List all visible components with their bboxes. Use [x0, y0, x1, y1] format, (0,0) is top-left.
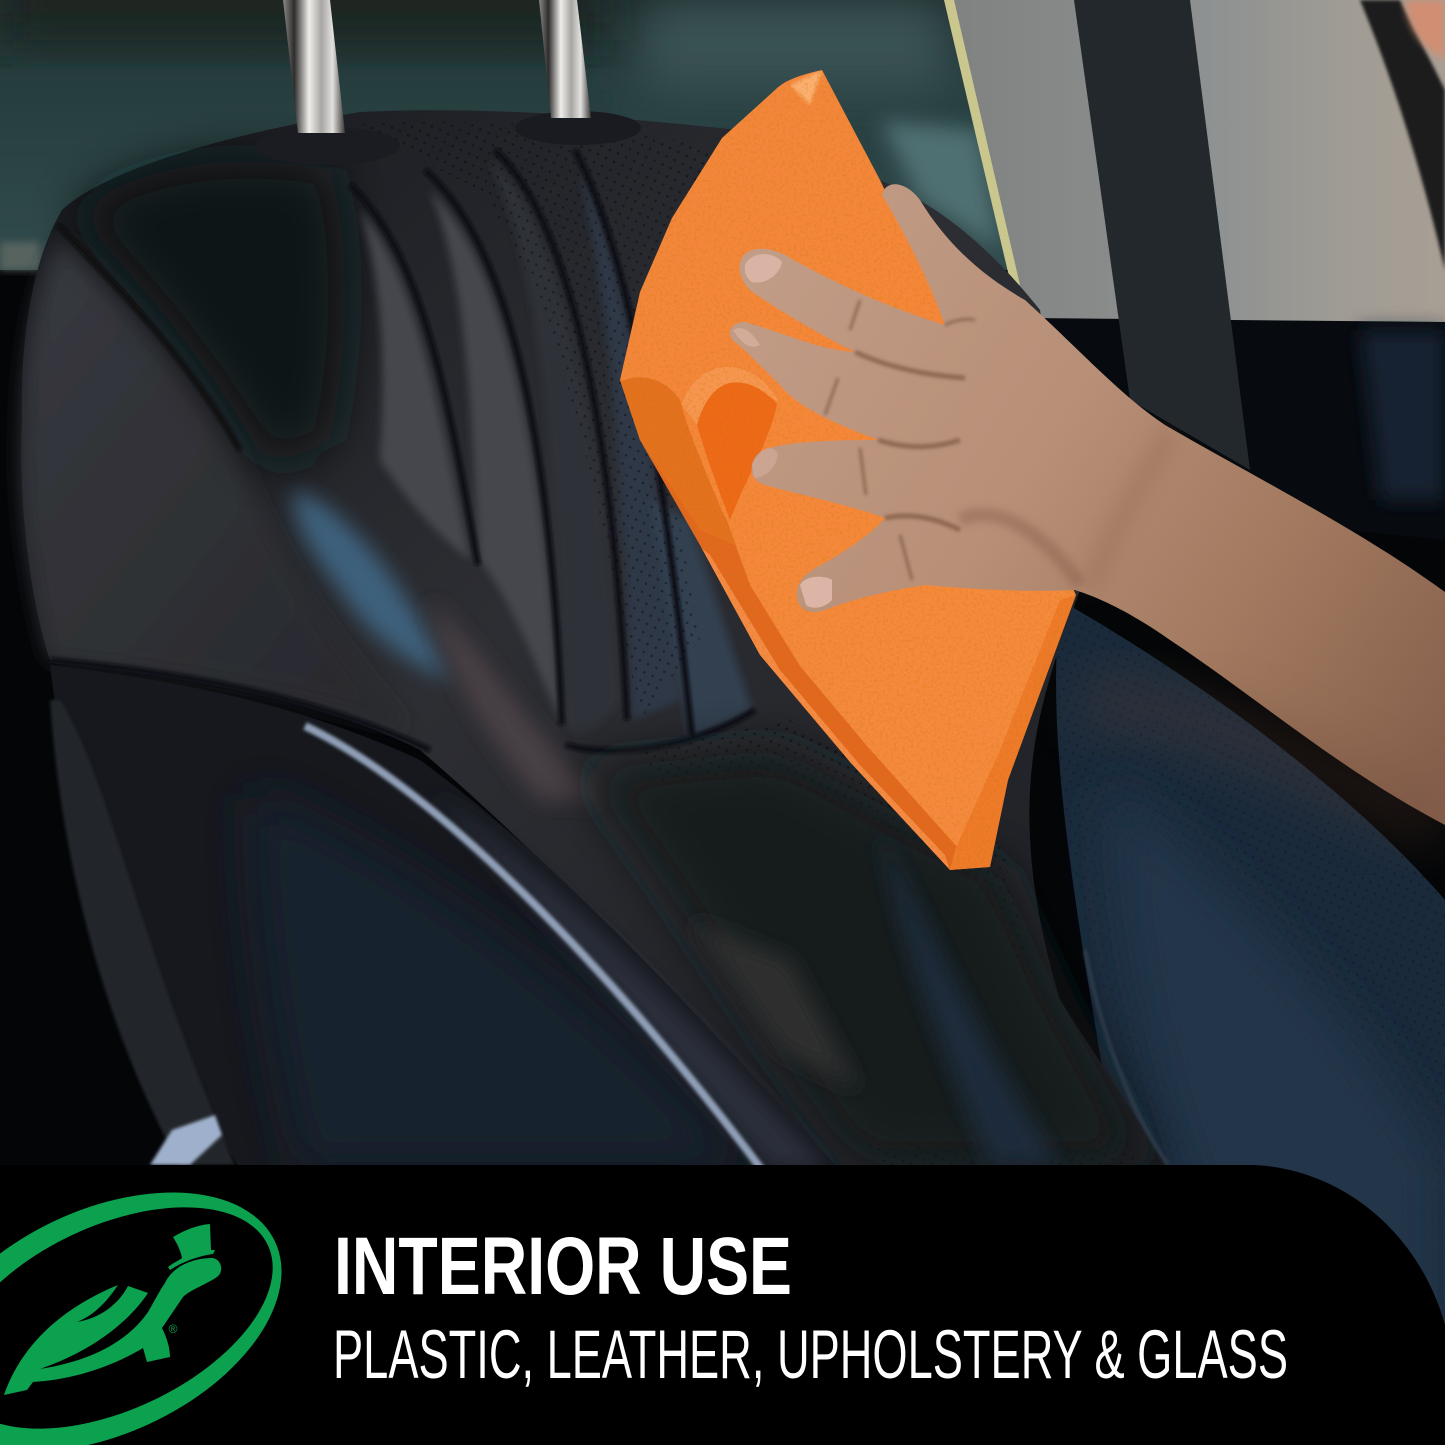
background: window view [0, 0, 1010, 270]
seat: right panel [1056, 600, 1445, 1445]
logo: top hat [168, 1224, 215, 1270]
towel: microfiber grain [600, 60, 1090, 880]
towel: lower darker layers [640, 440, 958, 870]
seat: dark glossy shoulder [75, 161, 345, 470]
seat: left side panel [21, 240, 410, 730]
logo: registered mark: ® [169, 1322, 178, 1336]
seat: lower bolster [50, 665, 840, 1170]
headrest post right [515, 0, 641, 145]
logo: turtle in oval [0, 1193, 282, 1445]
seat: headrest and backrest [21, 110, 1170, 1170]
seat: rib shadow lines [50, 150, 755, 751]
seat: pleated ribs [360, 160, 752, 740]
hand and arm [730, 184, 1445, 825]
seat: white clip [150, 1115, 222, 1165]
nails [745, 254, 782, 283]
headrest post left [254, 0, 400, 165]
background: door pillar [944, 0, 1445, 540]
seat: textured centre [580, 750, 1150, 1165]
background: seat belt [1074, 0, 1250, 470]
seat: perforated leather [350, 122, 720, 720]
seat: blue sheen [294, 490, 450, 680]
seat: white piping [305, 726, 762, 1170]
seat: side seam [58, 225, 240, 450]
heading: INTERIOR USE [334, 1221, 792, 1312]
towel: fold [620, 377, 735, 545]
black caption panel [0, 1165, 1445, 1445]
logo: oval ring [0, 1193, 282, 1445]
hand shading [825, 300, 975, 580]
microfiber towel [600, 60, 1090, 880]
hand outline with fingers [730, 184, 1445, 825]
logo: turtle body [4, 1258, 221, 1395]
